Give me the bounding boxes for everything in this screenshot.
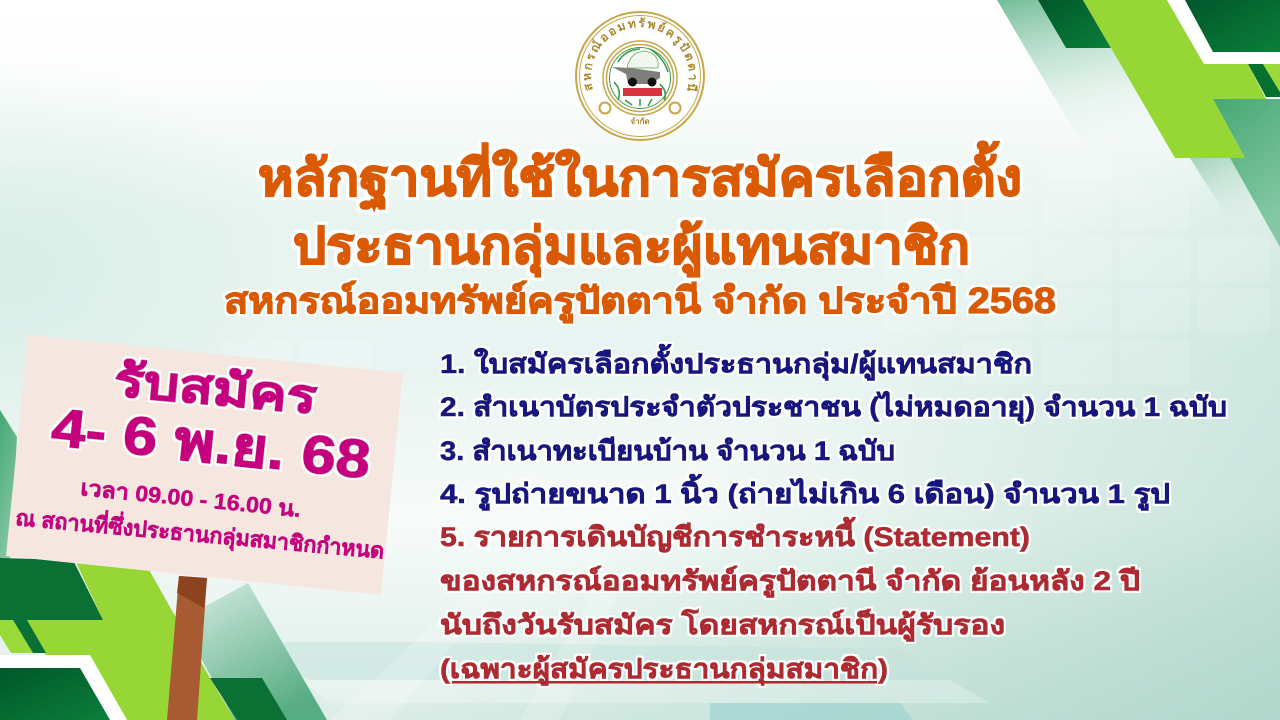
item 5 line 4: (เฉพาะผู้สมัครประธานกลุ่มสมาชิก) <box>440 654 888 686</box>
top right decorative shapes <box>997 0 1280 247</box>
bottom light rays <box>245 580 990 720</box>
sign board <box>6 335 403 595</box>
item 5 line 2: ของสหกรณ์ออมทรัพย์ครูปัตตานี จำกัด ย้อนหลัง 2 ปี <box>440 565 1140 598</box>
logo: cooperative seal: สหกรณ์ออมทรัพย์ครูปัตตานี <box>584 17 698 92</box>
subtitle: สหกรณ์ออมทรัพย์ครูปัตตานี จำกัด ประจำปี 2568 <box>224 280 1056 324</box>
sign time: เวลา 09.00 - 16.00 น. <box>80 475 302 522</box>
underline <box>452 681 877 684</box>
sign dates: 4- 6 พ.ย. 68 <box>49 397 373 490</box>
item 5 line 3: นับถึงวันรับสมัคร โดยสหกรณ์เป็นผู้รับรอง <box>440 607 1005 642</box>
item 2: 2. สำเนาบัตรประจำตัวประชาชน (ไม่หมดอายุ) จำนวน 1 ฉบับ <box>440 391 1227 424</box>
requirements list <box>440 343 1227 686</box>
bottom left decorative shapes <box>0 410 327 720</box>
sign post <box>167 576 207 720</box>
sign location: ณ สถานที่ซึ่งประธานกลุ่มสมาชิกกำหนด <box>14 501 386 566</box>
item 1: 1. ใบสมัครเลือกตั้งประธานกลุ่ม/ผู้แทนสมาชิก <box>440 343 1032 381</box>
item 5 line 1: 5. รายการเดินบัญชีการชำระหนี้ (Statement) <box>440 516 1030 553</box>
logo: cooperative seal: จำกัด <box>630 117 650 126</box>
item 3: 3. สำเนาทะเบียนบ้าน จำนวน 1 ฉบับ <box>440 436 895 466</box>
background tile pattern <box>222 135 1270 385</box>
title line 2: ประธานกลุ่มและผู้แทนสมาชิก <box>293 218 970 277</box>
item 4: 4. รูปถ่ายขนาด 1 นิ้ว (ถ่ายไม่เกิน 6 เดือน) จำนวน 1 รูป <box>440 473 1170 511</box>
logo: cooperative seal <box>575 11 705 141</box>
sign heading: รับสมัคร <box>112 353 319 423</box>
title line 1: หลักฐานที่ใช้ในการสมัครเลือกตั้ง <box>258 141 1022 210</box>
